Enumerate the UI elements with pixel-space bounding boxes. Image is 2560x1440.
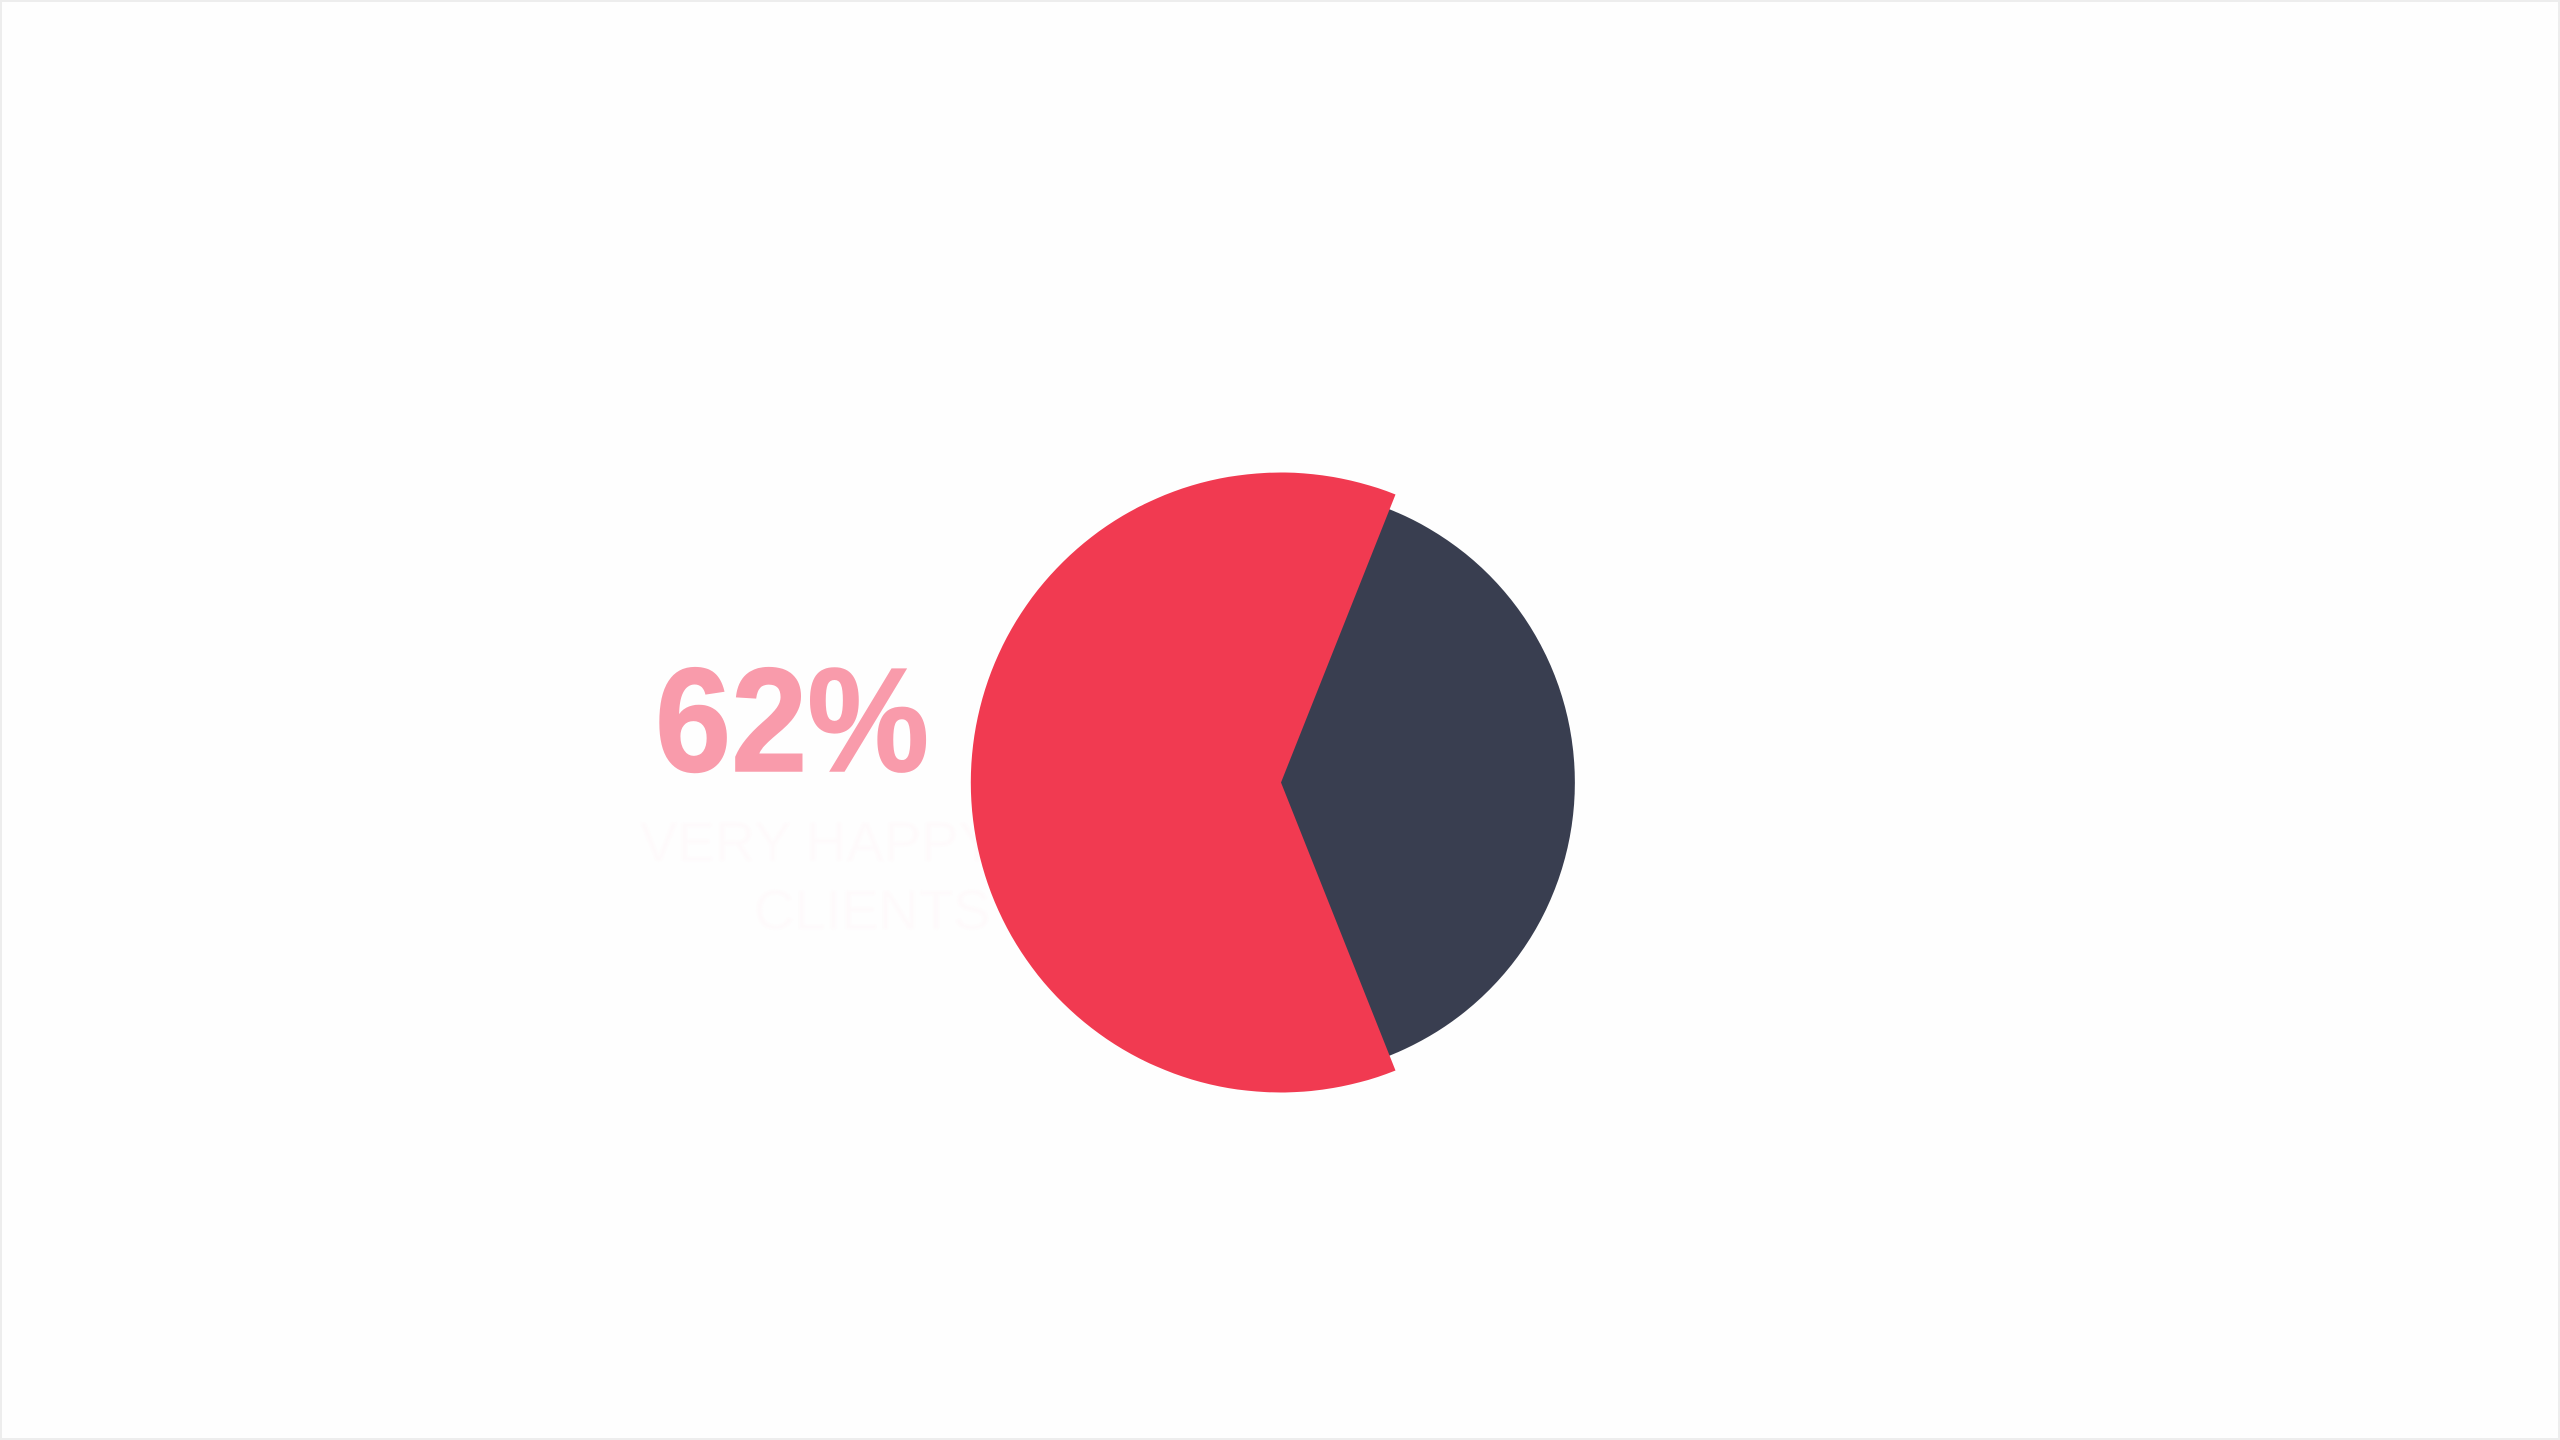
- pie slice: 62% very happy clients: [971, 472, 1396, 1093]
- pie slice: remaining 38%: [1270, 508, 1575, 1058]
- stat value: 62%: 62%: [655, 638, 929, 803]
- stat label: very happy clients: CLIENTS: [754, 878, 990, 941]
- stat label: very happy clients: [640, 814, 1010, 944]
- stat label: very happy clients: VERY HAPPY: [640, 810, 996, 873]
